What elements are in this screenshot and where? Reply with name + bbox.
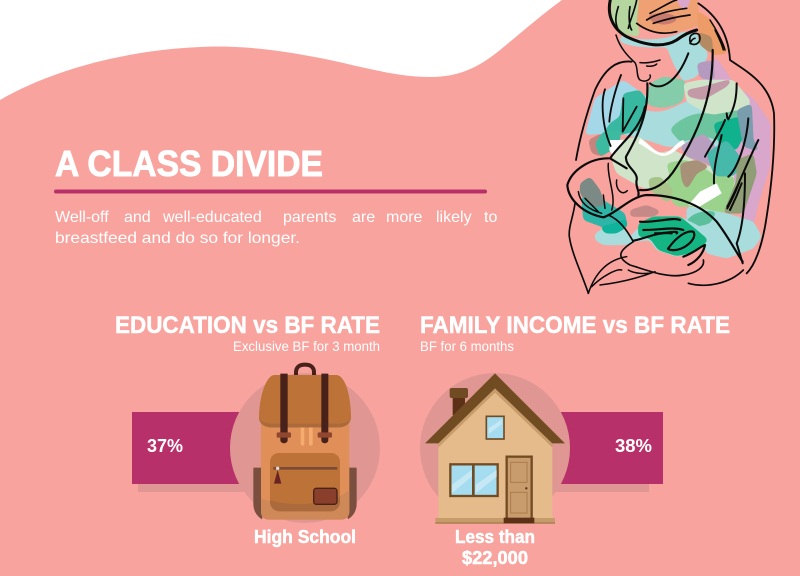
intro text: to	[484, 209, 497, 226]
bar: income 38%: 38%	[615, 436, 652, 456]
label: income: $22,000	[462, 548, 528, 568]
label: high school: High School	[254, 527, 356, 547]
title underline	[54, 190, 487, 194]
intro text: are	[352, 209, 375, 226]
subheading: income: BF for 6 months	[420, 338, 514, 354]
circle behind house	[420, 373, 570, 523]
intro text: Well-off	[55, 209, 109, 226]
intro text: likely	[436, 209, 472, 226]
intro text: well-educated	[162, 209, 262, 226]
intro text: more	[386, 209, 423, 226]
intro text: and	[124, 209, 151, 226]
bar: income 38%	[545, 412, 663, 492]
intro text: parents	[283, 209, 336, 226]
illustration: mother breastfeeding baby	[567, 0, 774, 293]
white wave header	[0, 0, 562, 100]
subheading: education: Exclusive BF for 3 month	[233, 338, 380, 354]
bar: education 37%: 37%	[147, 436, 183, 456]
bar: education 37%	[132, 412, 248, 492]
label: income: Less than	[455, 527, 535, 547]
icon: house	[425, 373, 565, 524]
circle behind backpack	[230, 373, 380, 523]
ink outline	[567, 0, 774, 293]
icon: backpack	[254, 365, 356, 520]
heading: income: FAMILY INCOME vs BF RATE	[420, 312, 730, 339]
colour blobs	[580, 0, 771, 258]
heading: education: EDUCATION vs BF RATE	[115, 312, 380, 339]
title: A CLASS DIVIDE	[55, 143, 323, 184]
intro text: breastfeed and do so for longer.	[55, 230, 300, 247]
